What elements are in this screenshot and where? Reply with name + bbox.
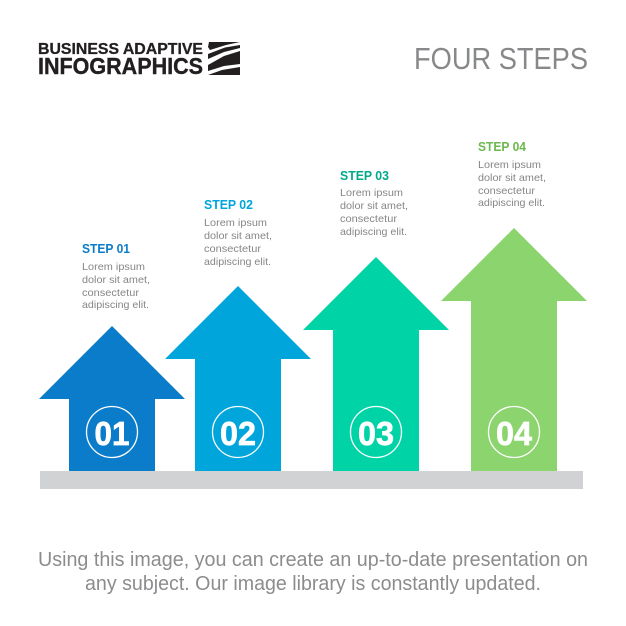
- badge 03: 03: [358, 416, 394, 453]
- caption: [38, 549, 588, 595]
- step 2 text block: STEP 02: [204, 198, 253, 212]
- logo text: BUSINESS ADAPTIVE: [38, 41, 203, 58]
- step 3 text block: Lorem ipsum: [340, 187, 403, 199]
- caption: any subject. Our image library is constantly updated.: [85, 573, 541, 595]
- step 2 text block: [204, 198, 272, 268]
- title: FOUR STEPS: [414, 42, 588, 76]
- badge 04: 04: [496, 416, 532, 453]
- badge 02: 02: [220, 416, 256, 453]
- caption: Using this image, you can create an up-to-date presentation on: [38, 549, 588, 571]
- step 2 text block: consectetur: [204, 243, 262, 255]
- logo icon: stripes: [208, 42, 240, 75]
- step 3 text block: consectetur: [340, 213, 398, 225]
- arrow 1: [39, 326, 185, 471]
- logo text: INFOGRAPHICS: [38, 53, 203, 79]
- badge 02: [212, 406, 264, 458]
- step 1 text block: STEP 01: [82, 242, 130, 256]
- step 3 text block: STEP 03: [340, 169, 389, 183]
- step 4 text block: Lorem ipsum: [478, 159, 541, 171]
- logo text: [38, 41, 203, 79]
- step 1 text block: consectetur: [82, 287, 140, 299]
- badge 03: [350, 406, 402, 458]
- arrow 3: [303, 257, 449, 471]
- step 4 text block: dolor sit amet,: [478, 172, 546, 184]
- step 3 text block: adipiscing elit.: [340, 226, 407, 238]
- step 2 text block: dolor sit amet,: [204, 230, 272, 242]
- step 4 text block: STEP 04: [478, 140, 526, 154]
- badge 01: [86, 406, 138, 458]
- step 2 text block: Lorem ipsum: [204, 217, 267, 229]
- step 3 text block: [340, 169, 408, 238]
- step 1 text block: adipiscing elit.: [82, 299, 149, 311]
- base bar: [40, 471, 583, 489]
- step 4 text block: consectetur: [478, 185, 536, 197]
- step 1 text block: Lorem ipsum: [82, 261, 145, 273]
- step 2 text block: adipiscing elit.: [204, 256, 271, 268]
- arrow 4: [441, 228, 587, 471]
- step 1 text block: [82, 242, 150, 311]
- arrow 2: [165, 286, 311, 471]
- badge 04: [488, 406, 540, 458]
- step 4 text block: adipiscing elit.: [478, 197, 545, 209]
- step 4 text block: [478, 140, 546, 209]
- logo: [38, 41, 240, 79]
- badge 01: 01: [94, 416, 130, 453]
- step 1 text block: dolor sit amet,: [82, 274, 150, 286]
- step 3 text block: dolor sit amet,: [340, 200, 408, 212]
